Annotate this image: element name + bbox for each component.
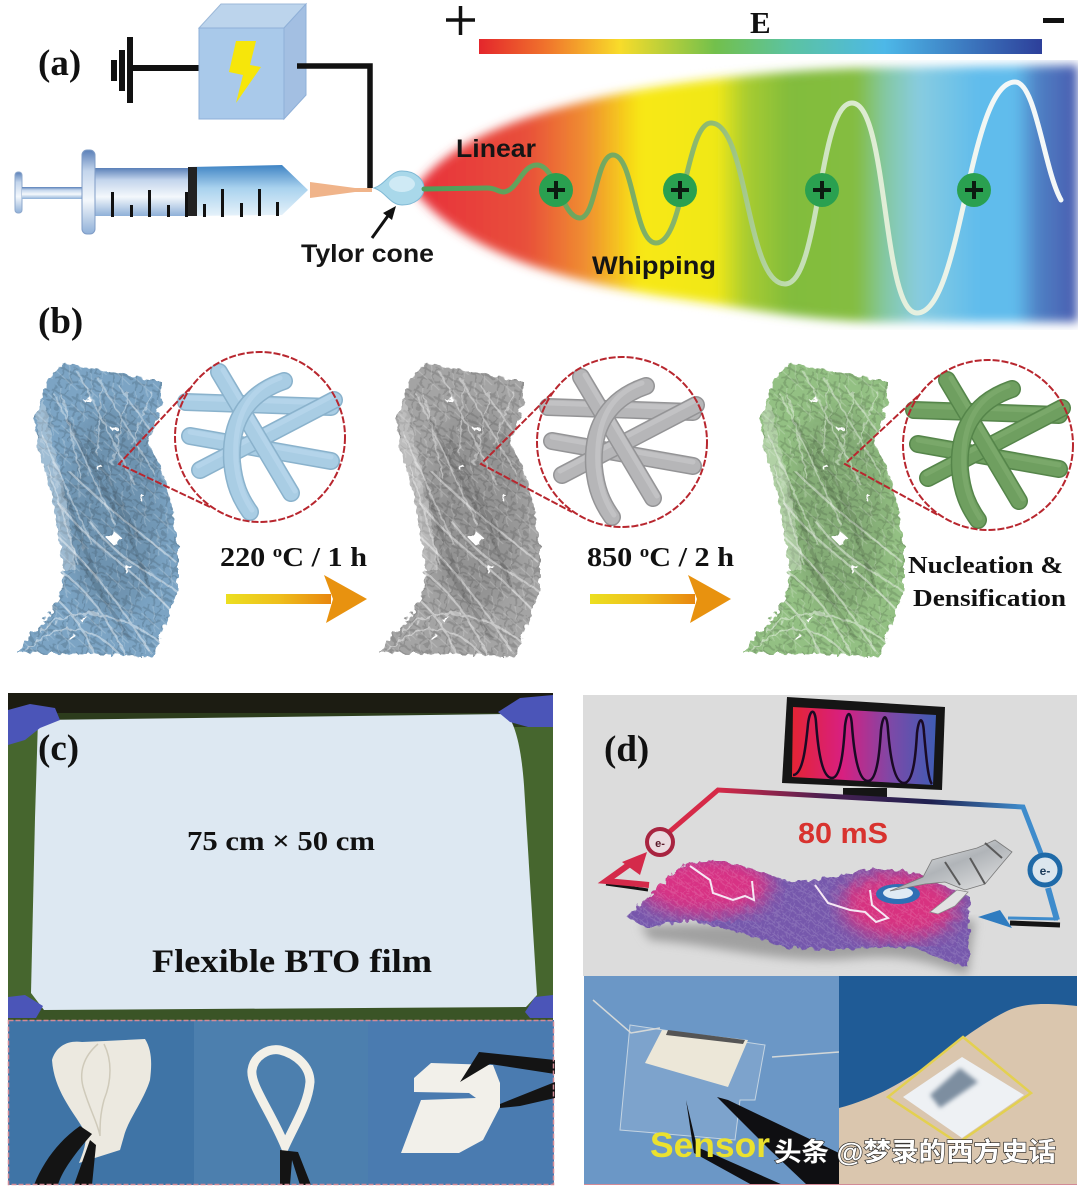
arrow: 220 C — [226, 575, 367, 623]
green zoom circle — [845, 360, 1073, 530]
heart fold — [82, 1044, 110, 1136]
electric field plume — [414, 65, 1078, 322]
field colour bar — [479, 39, 1042, 54]
panel: flexible film photo (c) — [8, 693, 555, 1185]
label: Tylor cone: Tylor cone — [301, 240, 434, 268]
electron badge right — [1030, 855, 1060, 885]
label: 220 C / 1 h: 220 — [220, 542, 260, 572]
label: E: E — [750, 5, 771, 40]
label: 850 C / 2 h: 850 — [587, 542, 628, 572]
watermark: 头条 @梦录的西方史话 — [774, 1137, 1056, 1167]
icon: ground symbol — [111, 37, 200, 103]
robot hand — [890, 840, 1012, 914]
circuit wire — [668, 790, 1042, 856]
panel: sensor schematic (d) — [583, 695, 1077, 1185]
heart-shaped film — [52, 1039, 151, 1163]
arrow: 850 C — [590, 575, 731, 623]
panel: electrospinning (a) — [15, 4, 1078, 322]
blue fibre film — [17, 362, 180, 658]
red current arrow — [606, 852, 649, 890]
grey zoom circle — [481, 357, 707, 527]
photo: sensor on skin — [839, 976, 1077, 1185]
wire to needle — [297, 66, 370, 188]
electron badge left: e- — [655, 838, 665, 850]
minus sign — [1043, 18, 1064, 23]
panel: thermal treatment (b) — [0, 301, 1073, 670]
label: 850 C / 2 h: C / 2 h — [649, 542, 734, 572]
monitor — [782, 697, 945, 799]
label: 850 C / 2 h: o — [640, 542, 649, 561]
plus charges — [539, 173, 991, 207]
label: Sensor: Sensor — [650, 1126, 770, 1165]
arrow to Tylor cone — [372, 206, 396, 238]
icon: high voltage box — [199, 4, 306, 119]
label (c): (c) — [38, 728, 79, 769]
label: 220 C / 1 h: C / 1 h — [282, 542, 367, 572]
sensor fabric — [626, 860, 979, 976]
label (d): (d) — [604, 729, 649, 770]
label: Flexible BTO film: Flexible BTO film — [152, 944, 432, 980]
Taylor cone droplet — [374, 171, 424, 205]
touch ring — [876, 884, 920, 904]
tweezers — [460, 1052, 555, 1108]
loop film — [252, 1050, 310, 1146]
curled film — [401, 1063, 500, 1153]
label (b): (b) — [38, 301, 83, 342]
label: size: 75 cm × 50 cm — [187, 826, 376, 856]
label: 220 C / 1 h: o — [273, 542, 282, 561]
photo: film on grass — [8, 693, 553, 1020]
label: Nucleation & Densification: Densification — [913, 586, 1066, 612]
blue zoom circle — [119, 352, 345, 522]
electron badge right: e- — [1040, 864, 1050, 878]
label: Linear: Linear — [456, 135, 536, 163]
label: Nucleation & Densification — [908, 553, 1066, 612]
photo strip: folded film — [8, 1020, 555, 1185]
icon: syringe — [15, 150, 372, 234]
electron badge left — [647, 829, 673, 855]
whipping jet — [424, 82, 1061, 313]
green fibre film — [743, 362, 906, 658]
label: Nucleation & Densification: Nucleation & — [908, 553, 1063, 579]
label: Whipping: Whipping — [592, 252, 716, 280]
label (a): (a) — [38, 43, 81, 84]
photo: sensor on clear substrate — [584, 976, 839, 1185]
grey fibre film — [379, 362, 542, 658]
plus sign — [446, 6, 475, 35]
loop tweezers — [280, 1150, 311, 1185]
blue return arrow — [978, 910, 1012, 928]
label: 80 mS: 80 mS — [798, 818, 888, 850]
scissors — [34, 1126, 96, 1185]
